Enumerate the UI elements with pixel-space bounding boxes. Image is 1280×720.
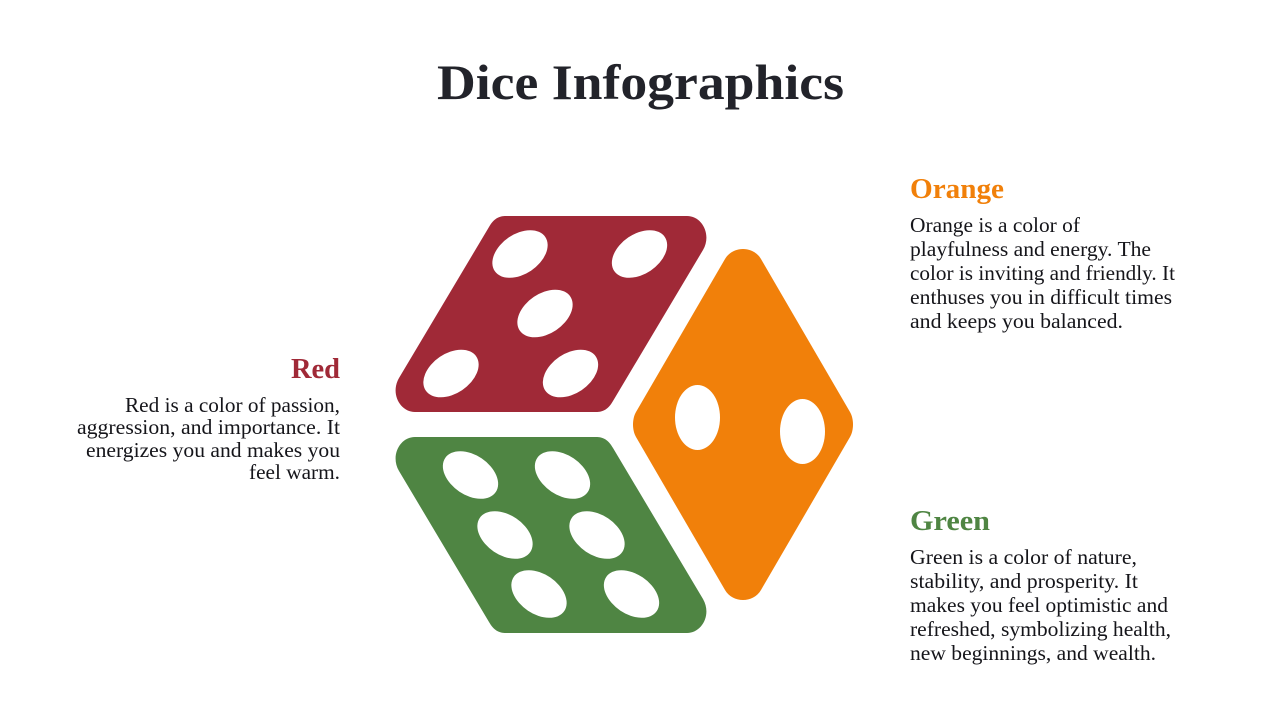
body: red: aggression, and importance. It (77, 415, 340, 439)
body: green: makes you feel optimistic and (910, 593, 1168, 617)
body: orange: playfulness and energy. The (910, 237, 1151, 261)
heading: orange: Orange (910, 174, 1004, 205)
body: red (77, 393, 341, 484)
body: orange: and keeps you balanced. (910, 309, 1123, 333)
body: green: new beginnings, and wealth. (910, 641, 1156, 665)
body: red: feel warm. (249, 460, 340, 484)
body: red: energizes you and makes you (86, 438, 341, 462)
body: orange (910, 213, 1175, 333)
body: green: stability, and prosperity. It (910, 569, 1138, 593)
body: orange: color is inviting and friendly. It (910, 261, 1175, 285)
text block: orange (910, 174, 1175, 333)
body: green: Green is a color of nature, (910, 545, 1137, 569)
heading: green: Green (910, 506, 990, 537)
panel: orange die face with two pips (633, 249, 853, 600)
body: orange: Orange is a color of (910, 213, 1080, 237)
body: green (910, 545, 1171, 665)
title: Dice Infographics (437, 54, 844, 110)
text block: red (77, 354, 341, 484)
body: green: refreshed, symbolizing health, (910, 617, 1171, 641)
panel: green die face with six pips (396, 437, 706, 633)
heading: red: Red (291, 354, 340, 385)
body: red: Red is a color of passion, (125, 393, 340, 417)
text block: green (910, 506, 1171, 665)
panel: red die face with five pips (396, 216, 706, 412)
dice graphic (396, 216, 853, 633)
body: orange: enthuses you in difficult times (910, 285, 1172, 309)
